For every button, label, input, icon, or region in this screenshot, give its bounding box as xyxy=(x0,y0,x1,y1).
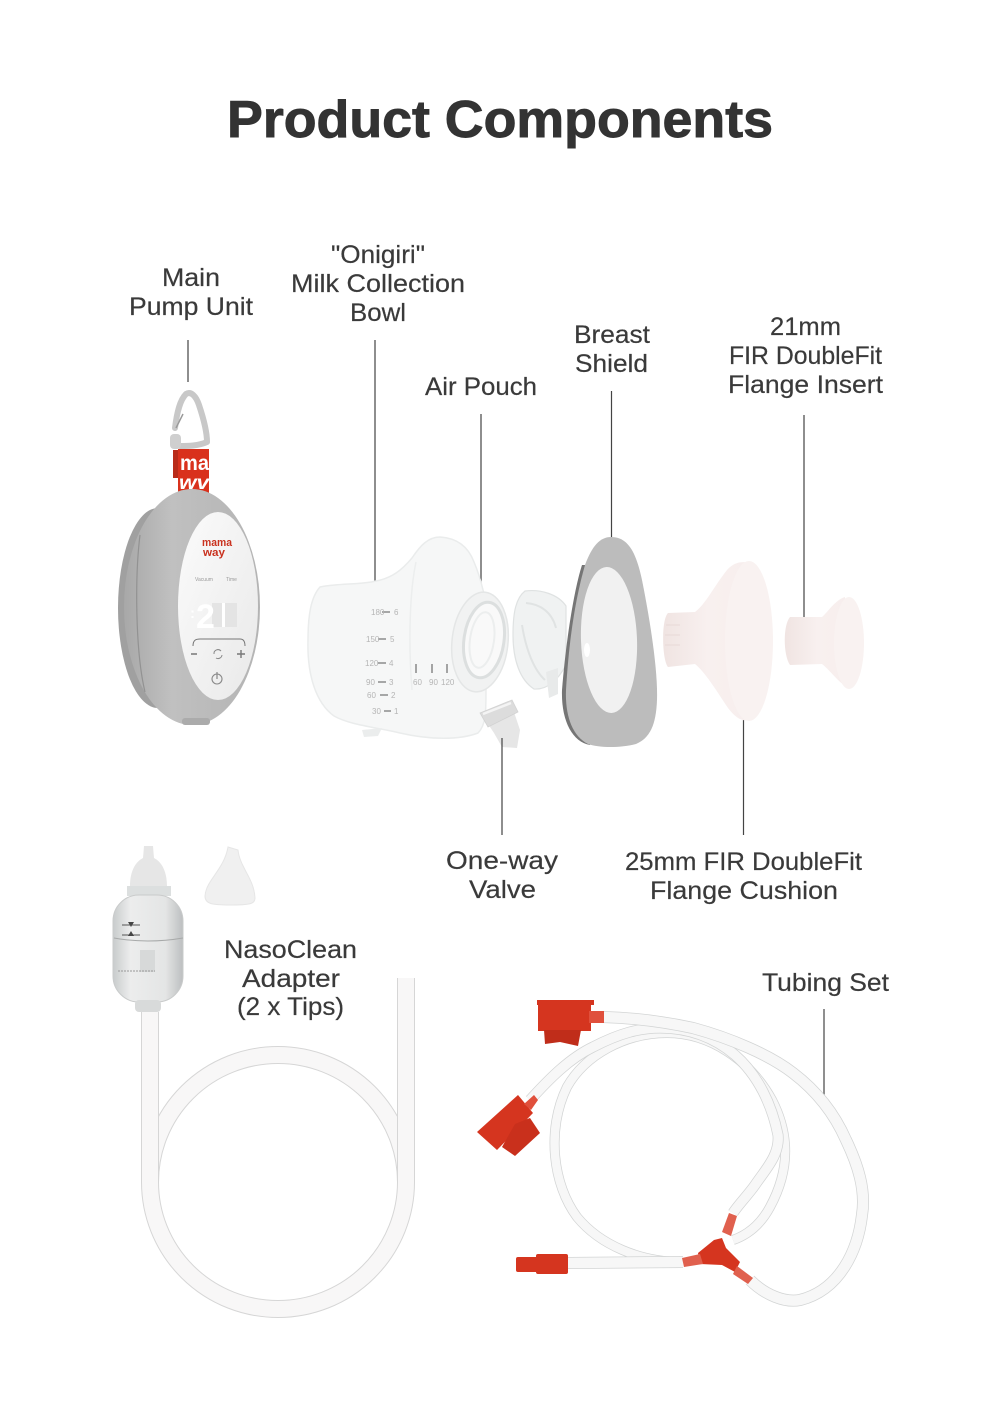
label: 21mm FIR DoubleFit Flange Insert xyxy=(728,313,883,618)
bowl measurement scale: 120 xyxy=(441,678,455,687)
label: Breast Shield xyxy=(574,321,650,537)
red strap: ma xyxy=(180,452,209,475)
bottom red connector xyxy=(516,1254,568,1274)
digital display xyxy=(190,598,237,636)
label: 21mm FIR DoubleFit Flange Insert: Flange Insert xyxy=(728,371,883,399)
bowl measurement scale: 4 xyxy=(389,659,394,668)
left red connector xyxy=(477,1095,540,1156)
label: NasoClean Adapter xyxy=(224,936,357,1021)
label: 21mm FIR DoubleFit Flange Insert: FIR DoubleFit xyxy=(729,342,882,370)
red strap: wv xyxy=(179,473,211,494)
label: Onigiri Milk Collection Bowl: Bowl xyxy=(350,299,406,327)
clear tubes xyxy=(530,1017,863,1301)
label: Breast Shield: Shield xyxy=(575,350,648,378)
bowl measurement scale xyxy=(365,608,455,716)
bowl measurement scale: 90 xyxy=(429,678,438,687)
label: Main Pump Unit: Pump Unit xyxy=(129,293,253,321)
icon: spare nasal tip xyxy=(205,847,255,905)
bowl measurement scale: 60 xyxy=(367,691,376,700)
label: One-way Valve: One-way xyxy=(446,847,559,875)
label: Tubing Set: Tubing Set xyxy=(762,969,889,997)
icon: 21mm flange insert xyxy=(785,597,864,689)
bowl measurement scale: 150 xyxy=(366,635,380,644)
bowl measurement scale: 6 xyxy=(394,608,399,617)
title: Product Components xyxy=(227,91,773,149)
NasoClean tubing loop xyxy=(150,978,406,1309)
icon: 25mm flange cushion xyxy=(663,561,773,721)
label: Onigiri Milk Collection Bowl: Milk Collection xyxy=(291,270,465,298)
icon: main pump unit xyxy=(118,393,260,725)
label: 25mm FIR DoubleFit Flange Cushion xyxy=(625,718,862,905)
icon: main pump unit: mama xyxy=(202,537,233,549)
carabiner clip xyxy=(170,393,207,449)
tubing set xyxy=(477,1000,863,1301)
label: Air Pouch: Air Pouch xyxy=(425,373,537,401)
label: Breast Shield: Breast xyxy=(574,321,650,349)
label: Tubing Set xyxy=(762,969,889,1099)
label: One-way Valve: Valve xyxy=(469,876,536,904)
label: One-way Valve xyxy=(446,847,559,904)
bowl measurement scale: 2 xyxy=(391,691,396,700)
bowl measurement scale: 5 xyxy=(390,635,395,644)
icon: breast shield xyxy=(562,537,657,747)
bowl measurement scale: 60 xyxy=(413,678,422,687)
bowl measurement scale: 3 xyxy=(389,678,394,687)
bowl measurement scale: 90 xyxy=(366,678,375,687)
air pouch ring xyxy=(447,589,513,695)
icon: milk collection bowl xyxy=(308,537,513,738)
icon: connector gasket xyxy=(513,591,566,698)
label: NasoClean Adapter: (2 x Tips) xyxy=(237,993,344,1021)
red strap xyxy=(173,449,211,494)
red Y junction xyxy=(682,1213,753,1284)
digital display: : xyxy=(190,605,195,622)
icon: main pump unit: Vacuum xyxy=(195,577,213,583)
bowl measurement scale: 30 xyxy=(372,707,381,716)
bowl measurement scale: 120 xyxy=(365,659,379,668)
front control panel xyxy=(178,512,258,700)
label: 25mm FIR DoubleFit Flange Cushion: 25mm FIR DoubleFit xyxy=(625,848,862,876)
label: Onigiri Milk Collection Bowl xyxy=(291,241,465,582)
pump body xyxy=(118,508,198,708)
label: Onigiri Milk Collection Bowl: "Onigiri" xyxy=(331,241,425,269)
icon: main pump unit: way xyxy=(202,547,226,559)
label: NasoClean Adapter: Adapter xyxy=(242,965,340,993)
icon: one-way valve xyxy=(480,700,520,835)
label: NasoClean Adapter: NasoClean xyxy=(224,936,357,964)
digital display: 2 xyxy=(196,598,215,636)
bowl measurement scale: 180 xyxy=(371,608,385,617)
icon: main pump unit: Time xyxy=(226,577,237,583)
label: 21mm FIR DoubleFit Flange Insert: 21mm xyxy=(770,313,841,341)
label: Main Pump Unit: Main xyxy=(162,264,220,292)
label: 25mm FIR DoubleFit Flange Cushion: Flange Cushion xyxy=(650,877,838,905)
icon: NasoClean adapter body xyxy=(113,846,183,1012)
top red connector xyxy=(537,1000,604,1046)
label: Main Pump Unit xyxy=(129,264,253,382)
bowl measurement scale: 1 xyxy=(394,707,399,716)
